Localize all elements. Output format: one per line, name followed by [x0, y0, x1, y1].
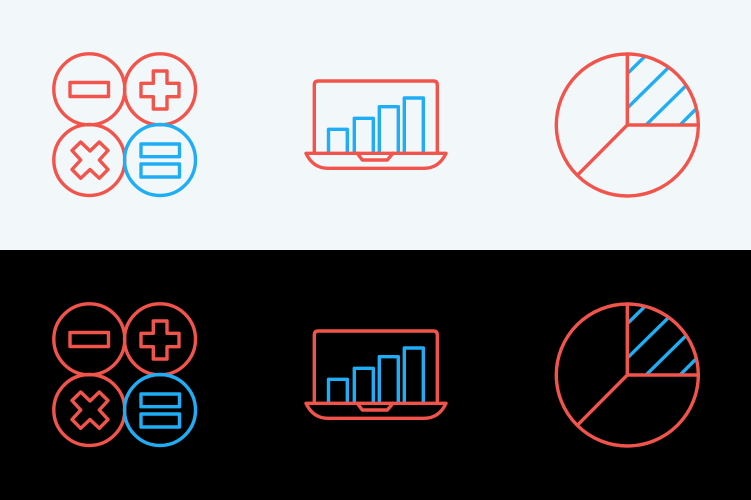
icon: laptop bar chart, dark — [306, 331, 446, 418]
icon: pie chart, light — [556, 54, 698, 196]
icon: calculator symbols, dark — [54, 304, 196, 446]
panel: dark background — [0, 250, 751, 500]
panel: light background — [0, 0, 751, 250]
icon: calculator symbols, light — [54, 54, 196, 196]
icon: pie chart, dark — [556, 304, 698, 446]
icon: laptop bar chart, light — [306, 81, 446, 168]
